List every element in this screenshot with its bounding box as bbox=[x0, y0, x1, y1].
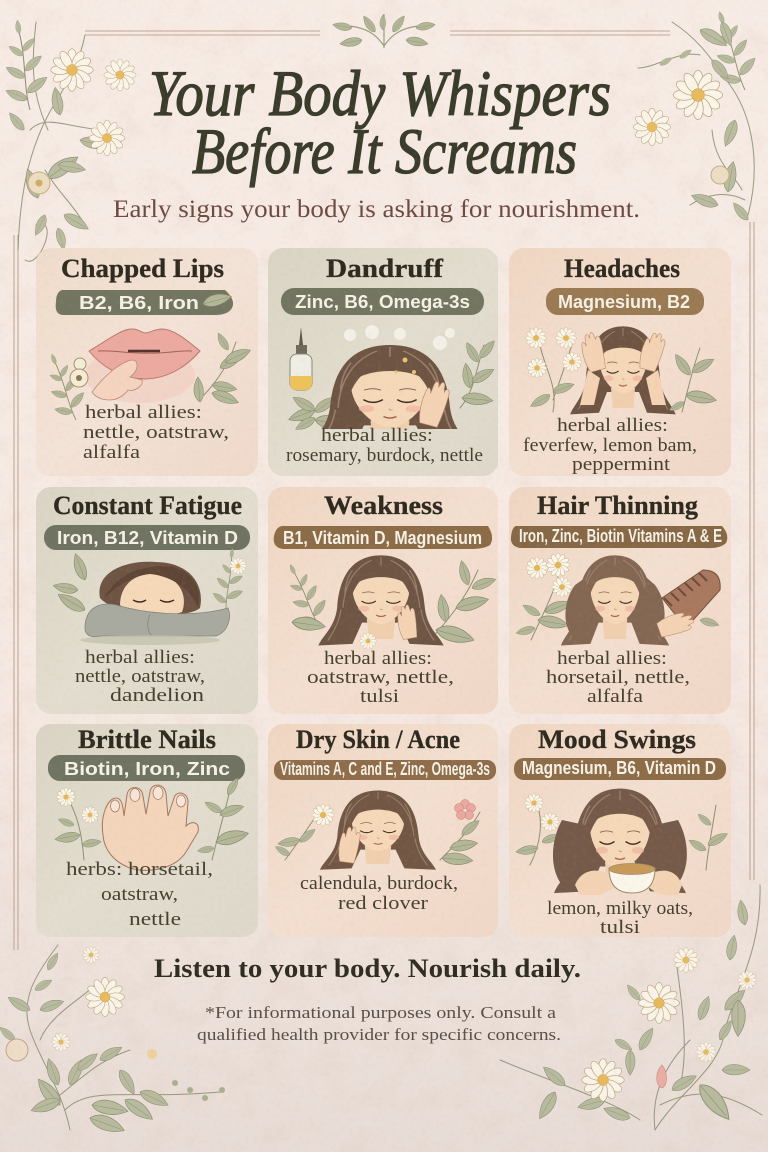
vitamin pill: Magnesium, B2 bbox=[558, 292, 690, 312]
disclaimer: qualified health provider for specific concerns. bbox=[197, 1025, 561, 1044]
disclaimer: *For informational purposes only. Consult a bbox=[205, 1003, 557, 1022]
heading: Brittle Nails bbox=[78, 725, 216, 754]
herbs text bbox=[547, 898, 693, 938]
vitamin pill bbox=[48, 755, 245, 781]
heading: Dry Skin / Acne bbox=[296, 725, 460, 754]
heading: Chapped Lips bbox=[61, 254, 224, 283]
panel: chapped lips bbox=[35, 248, 258, 476]
herbal allies text: alfalfa bbox=[83, 442, 141, 463]
card bbox=[268, 248, 498, 476]
card bbox=[509, 724, 731, 937]
top center ornament bbox=[332, 14, 436, 48]
disclaimer bbox=[197, 1003, 561, 1044]
herbal allies text: herbal allies: bbox=[557, 648, 667, 669]
floral corner: bottom right bbox=[500, 885, 762, 1130]
herbs text: red clover bbox=[338, 893, 429, 914]
herbal allies text bbox=[307, 648, 454, 707]
vitamin pill bbox=[546, 288, 704, 315]
vitamin pill: Zinc, B6, Omega-3s bbox=[295, 292, 470, 312]
panel: constant fatigue bbox=[36, 487, 258, 714]
herb sprigs bbox=[54, 776, 250, 860]
vitamin pill: Vitamins A, C and E, Zinc, Omega-3s bbox=[280, 759, 490, 779]
heading: Mood Swings bbox=[538, 725, 696, 754]
card bbox=[36, 248, 258, 476]
heading: Hair Thinning bbox=[537, 491, 698, 520]
subtitle: Early signs your body is asking for nourishment. bbox=[113, 196, 640, 223]
herbal allies text bbox=[75, 647, 205, 706]
heading: Headaches bbox=[564, 254, 680, 283]
title: Before It Screams bbox=[192, 116, 577, 188]
panel: brittle nails bbox=[36, 724, 258, 937]
herbal allies text bbox=[523, 415, 697, 475]
herbal allies text: nettle, oatstraw, bbox=[83, 422, 229, 443]
vitamin pill: Biotin, Iron, Zinc bbox=[64, 759, 230, 779]
herbal allies text: herbal allies: bbox=[557, 415, 668, 436]
vitamin pill bbox=[274, 759, 496, 780]
herbal allies text: nettle, oatstraw, bbox=[75, 666, 205, 687]
panel: dandruff bbox=[268, 248, 498, 476]
herbal allies text: horsetail, nettle, bbox=[546, 667, 690, 688]
herbs text: lemon, milky oats, bbox=[547, 898, 693, 919]
herbal allies text: dandelion bbox=[110, 685, 205, 706]
border frame bbox=[14, 31, 754, 950]
herbs text: herbs: horsetail, bbox=[66, 859, 213, 880]
herb sprigs bbox=[35, 331, 252, 426]
panel: mood swings bbox=[509, 724, 731, 938]
icon: hand with nails bbox=[102, 785, 198, 870]
herbal allies text: oatstraw, nettle, bbox=[307, 667, 454, 688]
herbal allies text: alfalfa bbox=[587, 686, 644, 707]
herbal allies text: herbal allies: bbox=[85, 647, 195, 668]
icon: lips with fingers bbox=[85, 329, 200, 403]
illustration: girl touching cheek bbox=[274, 791, 482, 870]
herbal allies text: rosemary, burdock, nettle bbox=[286, 445, 483, 466]
vitamin pill: Iron, B12, Vitamin D bbox=[57, 528, 238, 548]
illustration: girl with comb bbox=[515, 553, 720, 646]
heading: Dandruff bbox=[326, 254, 443, 283]
card bbox=[268, 487, 498, 714]
floral corner: top right bbox=[633, 5, 765, 223]
title: Your Body Whispers bbox=[149, 58, 611, 130]
card bbox=[268, 724, 498, 937]
vitamin pill bbox=[281, 288, 484, 315]
herbal allies text: feverfew, lemon bam, bbox=[523, 435, 697, 456]
herbs text bbox=[300, 873, 458, 914]
heading: Weakness bbox=[324, 491, 443, 520]
panel: headaches bbox=[509, 248, 731, 476]
heading: Constant Fatigue bbox=[53, 491, 242, 520]
panel: hair thinning bbox=[509, 487, 731, 714]
illustration: girl with tea cup bbox=[515, 789, 729, 895]
card bbox=[36, 487, 258, 714]
panel: dry skin and acne bbox=[268, 724, 498, 937]
vitamin pill: B2, B6, Iron bbox=[79, 293, 199, 313]
vitamin pill bbox=[56, 290, 233, 315]
tagline: Listen to your body. Nourish daily. bbox=[154, 954, 581, 983]
card bbox=[509, 487, 731, 714]
herbal allies text bbox=[546, 648, 690, 707]
card bbox=[509, 248, 731, 476]
herbal allies text: herbal allies: bbox=[85, 402, 202, 423]
vitamin pill bbox=[44, 525, 250, 550]
herbs text bbox=[66, 859, 213, 930]
herbal allies text: herbal allies: bbox=[324, 648, 432, 669]
illustration: girl holding head bbox=[525, 326, 717, 414]
herbs text: oatstraw, bbox=[101, 884, 178, 905]
herbal allies text bbox=[286, 425, 483, 466]
illustration: girl sleeping on arms bbox=[52, 547, 248, 645]
illustration: girl with dandruff and oil bottle bbox=[288, 325, 495, 430]
vitamin pill: B1, Vitamin D, Magnesium bbox=[283, 528, 482, 548]
illustration: weak girl with herbs bbox=[274, 555, 497, 650]
card bbox=[36, 724, 258, 937]
panel: weakness bbox=[268, 487, 498, 714]
herbal allies text bbox=[83, 402, 229, 463]
herbs text: calendula, burdock, bbox=[300, 873, 458, 894]
vitamin pill: Magnesium, B6, Vitamin D bbox=[522, 758, 716, 778]
herbal allies text: peppermint bbox=[572, 454, 671, 475]
herbal allies text: tulsi bbox=[360, 686, 399, 707]
floral corner: bottom left bbox=[0, 945, 225, 1136]
floral corner: top left bbox=[0, 17, 136, 261]
herbs text: nettle bbox=[129, 909, 181, 930]
herbs text: tulsi bbox=[600, 917, 640, 938]
title bbox=[149, 58, 611, 188]
herbal allies text: herbal allies: bbox=[321, 425, 433, 446]
